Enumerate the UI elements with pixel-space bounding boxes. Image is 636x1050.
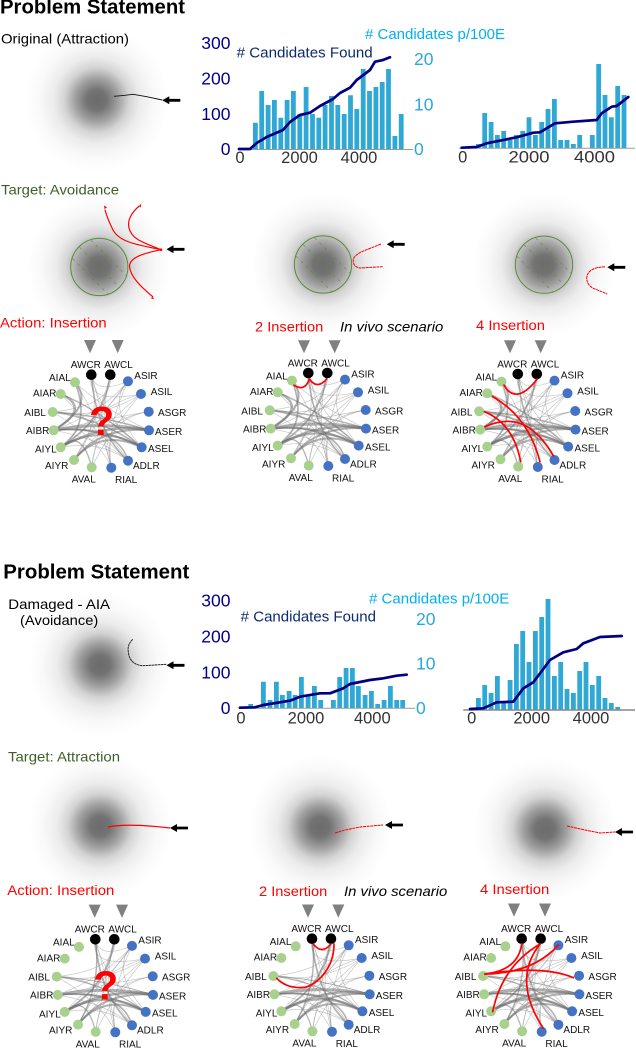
- neurons and names: AWCL: [531, 359, 560, 370]
- neurons and names: AIYR: [262, 459, 285, 470]
- neurons and names: AIAL: [479, 937, 502, 948]
- trajectory: 2 insertion: [353, 244, 383, 268]
- right axis labels: [414, 49, 434, 159]
- left axis labels: 100: [201, 662, 231, 682]
- arrow: 2 insertion stimulus: [385, 821, 403, 829]
- neurons and names: ASER: [155, 427, 182, 438]
- network: 2 insertion: [245, 904, 407, 1050]
- neurons and names: AIYL: [35, 445, 57, 456]
- left axis labels: 0: [221, 698, 231, 718]
- label: target avoidance: Target: Avoidance: [1, 181, 119, 197]
- neurons and names: AIYL: [256, 1009, 278, 1020]
- neurons and names: ASEL: [369, 1008, 395, 1019]
- label: in vivo scenario: In vivo scenario: [340, 319, 444, 335]
- neurons and names: AIAR: [463, 953, 487, 964]
- x axis labels: 2000: [288, 709, 324, 727]
- trajectory: attraction target: [108, 825, 170, 828]
- right axis labels: [416, 609, 436, 718]
- neurons and names: ASER: [585, 991, 613, 1002]
- neurons and names: AIYR: [45, 461, 68, 472]
- network: unknown insertion: [24, 340, 186, 486]
- x axis labels: 4000: [574, 148, 615, 166]
- right axis labels: 20: [416, 609, 436, 629]
- neurons and names: RIAL: [336, 1039, 358, 1050]
- neurons and names: AIBR: [247, 990, 270, 1001]
- neurons and names: ASGR: [158, 408, 186, 419]
- neurons and names: ASIL: [581, 951, 603, 962]
- right axis labels: 0: [416, 698, 426, 718]
- neurons and names: ASEL: [578, 1008, 604, 1019]
- neurons and names: AIBL: [28, 973, 50, 984]
- trajectory: 2 insertion: [335, 825, 383, 833]
- x axis labels: [236, 709, 391, 727]
- neurons and names: AWCL: [104, 360, 133, 371]
- left axis labels: 300: [201, 591, 231, 611]
- legend: candidates per 100E: # Candidates p/100E: [365, 27, 505, 43]
- x axis labels: 0: [236, 709, 246, 727]
- trajectories: three avoidance paths: [104, 204, 162, 299]
- arrow: 4 insertion stimulus: [607, 263, 625, 271]
- neurons and names: ADLR: [137, 1026, 164, 1037]
- neurons and names: AVAL: [498, 474, 523, 485]
- cumulative line: [462, 97, 628, 148]
- neurons and names: AIBL: [451, 407, 473, 418]
- x axis: [459, 147, 635, 149]
- neurons and names: RIAL: [332, 473, 355, 484]
- right axis labels: 10: [416, 653, 436, 673]
- neurons and names: AWCR: [75, 925, 105, 936]
- neurons and names: AWCR: [497, 359, 527, 370]
- gradient blob: damaged: [28, 593, 172, 737]
- bars: [476, 599, 620, 710]
- right axis labels: 0: [414, 139, 424, 159]
- neurons and names: AWCR: [291, 924, 322, 935]
- chart: candidates found, in vivo: [458, 64, 635, 166]
- panel: top experiment, attraction to avoidance: [0, 0, 635, 486]
- left axis labels: [201, 591, 231, 718]
- neurons and names: AWCL: [321, 358, 350, 369]
- x axis labels: 4000: [354, 709, 391, 727]
- neurons and names: ASIL: [155, 952, 177, 963]
- neurons and names: ASGR: [588, 972, 617, 983]
- cumulative line: [470, 636, 622, 709]
- neurons and names: AWCR: [71, 360, 101, 371]
- x axis labels: 4000: [573, 709, 609, 727]
- trajectory: original: [114, 94, 162, 100]
- neurons and names: AIAL: [270, 937, 292, 948]
- neurons and names: RIAL: [115, 475, 138, 486]
- neurons and names: [24, 360, 186, 486]
- neurons and names: ASIR: [138, 936, 162, 947]
- neurons and names: AIBL: [241, 406, 263, 417]
- neurons and names: ADLR: [133, 461, 160, 472]
- bars: [253, 69, 404, 150]
- sensory input markers: [89, 905, 128, 918]
- neurons and names: AIBR: [30, 991, 53, 1002]
- bars: [248, 668, 405, 708]
- arrow: original stimulus: [162, 96, 180, 104]
- synaptic edges: [479, 374, 576, 467]
- neurons and names: AWCL: [535, 924, 564, 935]
- neurons and names: AIYL: [462, 444, 484, 455]
- neurons and names: AWCR: [288, 358, 318, 369]
- neurons and names: AIBL: [24, 408, 46, 419]
- x axis labels: [467, 709, 609, 727]
- label: target attraction: Target: Attraction: [8, 748, 120, 764]
- left axis labels: 200: [201, 627, 231, 647]
- neurons and names: AVAL: [502, 1039, 527, 1050]
- gradient blob: attraction target: [28, 754, 172, 898]
- inserted connections: [294, 379, 327, 388]
- chart: candidates found, in vivo damaged: [463, 599, 635, 727]
- x axis labels: 2000: [513, 709, 550, 727]
- x axis: [240, 707, 415, 709]
- x axis labels: 2000: [508, 148, 550, 166]
- neurons and names: AIAR: [37, 953, 60, 964]
- neurons and names: [451, 359, 613, 485]
- neurons and names: [245, 924, 407, 1050]
- neurons and names: ASGR: [584, 407, 613, 418]
- neurons and names: ASIR: [561, 370, 584, 381]
- label: in vivo scenario: In vivo scenario: [344, 883, 448, 899]
- neurons and names: ASIR: [351, 369, 375, 380]
- left axis labels: 300: [201, 33, 231, 53]
- x axis labels: 2000: [281, 149, 318, 167]
- gradient blob: 4 insertion result: [473, 757, 617, 901]
- neurons and names: ASIL: [577, 386, 599, 397]
- neurons and names: ASEL: [148, 444, 174, 455]
- label: original attraction: Original (Attraction): [1, 30, 129, 46]
- synaptic edges: [270, 373, 366, 466]
- network: unknown insertion: [28, 905, 190, 1050]
- title: Problem Statement: [3, 561, 190, 583]
- neurons and names: [241, 358, 403, 484]
- label: damaged AIA avoidance: (Avoidance): [20, 612, 98, 628]
- synaptic edges: [483, 939, 579, 1032]
- neurons and names: ASER: [372, 425, 399, 436]
- x axis labels: [458, 148, 615, 166]
- neurons and names: AIAL: [476, 372, 498, 383]
- bars: [476, 64, 626, 148]
- inserted connections: [277, 944, 334, 988]
- neurons and names: ASEL: [574, 443, 601, 454]
- neurons and names: RIAL: [545, 1039, 568, 1050]
- arrow: target stimulus: [166, 245, 184, 253]
- x axis labels: [235, 149, 377, 167]
- neurons and names: AIYR: [475, 1025, 499, 1036]
- panel: bottom experiment, avoidance to attraction: [3, 561, 635, 1050]
- network: 4 insertion: [451, 340, 613, 485]
- neurons and names: ASIR: [565, 935, 588, 946]
- sensory input markers: [298, 340, 341, 353]
- neurons and names: ADLR: [563, 1025, 590, 1036]
- gradient blob: original: [25, 28, 169, 172]
- neurons and names: AIAR: [33, 389, 56, 400]
- right axis labels: 10: [414, 95, 434, 115]
- x axis labels: 0: [467, 709, 476, 727]
- legend: candidates found: # Candidates Found: [241, 610, 376, 626]
- network: 4 insertion: [455, 904, 617, 1050]
- network: 2 insertion: [241, 340, 403, 484]
- neurons and names: ASEL: [152, 1009, 178, 1020]
- neurons and names: ASIR: [355, 935, 378, 946]
- neurons and names: ASGR: [375, 406, 403, 417]
- neurons and names: AIBR: [243, 424, 266, 435]
- x axis: [240, 148, 413, 150]
- neurons and names: RIAL: [542, 474, 564, 485]
- neurons and names: ASER: [159, 992, 186, 1003]
- neurons and names: ASER: [376, 991, 403, 1002]
- neurons and names: AIAR: [250, 387, 273, 398]
- gradient blob with target zone: 2 insertion result: [251, 192, 395, 336]
- neurons and names: AIYR: [472, 460, 495, 471]
- question mark: ?: [89, 398, 114, 444]
- neurons and names: ASIL: [371, 951, 394, 962]
- neurons and names: AIAL: [49, 373, 71, 384]
- cumulative line: [239, 57, 390, 149]
- neurons and names: ADLR: [354, 1025, 380, 1036]
- arrow: 2 insertion stimulus: [387, 240, 405, 248]
- neurons and names: AVAL: [292, 1039, 317, 1050]
- label: 2 insertion: 2 Insertion: [259, 883, 327, 899]
- label: damaged AIA avoidance: Damaged - AIA: [8, 596, 111, 612]
- neurons and names: AVAL: [76, 1039, 100, 1050]
- sensory input markers: [504, 340, 547, 353]
- neurons and names: AIBR: [26, 426, 49, 437]
- neurons and names: ASER: [582, 426, 609, 437]
- right axis labels: 20: [414, 49, 434, 69]
- neurons and names: AIBL: [455, 972, 477, 983]
- label: 4 insertion: 4 Insertion: [480, 881, 549, 897]
- left axis labels: [201, 33, 231, 159]
- inserted connections: [484, 379, 553, 462]
- label: 2 insertion: 2 Insertion: [255, 319, 323, 335]
- neurons and names: ASIL: [151, 387, 173, 398]
- gradient blob with target zone: avoidance target: [27, 195, 171, 339]
- neurons and names: ASIL: [368, 385, 390, 396]
- trajectory: damaged: [128, 639, 167, 666]
- label: action insertion: Action: Insertion: [7, 882, 114, 898]
- sensory input markers: [302, 904, 344, 918]
- sensory input markers: [84, 340, 124, 353]
- label: action insertion: Action: Insertion: [0, 314, 107, 330]
- neurons and names: AIAL: [266, 371, 288, 382]
- neurons and names: AIAL: [53, 938, 75, 949]
- neurons and names: AIYL: [465, 1009, 488, 1020]
- question mark: ?: [93, 963, 118, 1009]
- neurons and names: AIYL: [39, 1009, 61, 1020]
- neurons and names: AWCL: [108, 925, 137, 936]
- inserted connections: [485, 944, 573, 1028]
- arrow: damaged stimulus: [166, 661, 184, 669]
- arrow: target stimulus: [170, 824, 188, 832]
- neurons and names: AIBR: [452, 425, 476, 436]
- neurons and names: AIYR: [49, 1026, 72, 1037]
- label: damaged AIA avoidance: [8, 596, 111, 628]
- x axis labels: 0: [235, 149, 245, 167]
- x axis: [463, 709, 635, 711]
- cumulative line: [240, 675, 407, 708]
- neurons and names: AWCL: [325, 924, 354, 935]
- trajectory: 4 insertion: [587, 267, 607, 294]
- gradient blob with target zone: 4 insertion result: [472, 193, 616, 337]
- gradient blob: 2 insertion result: [248, 755, 392, 899]
- neurons and names: [455, 924, 617, 1050]
- neurons and names: AIBL: [245, 972, 267, 983]
- neurons and names: [28, 925, 190, 1050]
- neurons and names: AWCR: [501, 924, 531, 935]
- left axis labels: 0: [221, 139, 231, 159]
- neurons and names: AIYL: [252, 443, 274, 454]
- arrow: 4 insertion stimulus: [615, 828, 633, 836]
- trajectory: 4 insertion: [567, 826, 615, 833]
- label: 4 insertion: 4 Insertion: [476, 317, 545, 333]
- chart: candidates found, original: [201, 27, 505, 167]
- sensory input markers: [508, 904, 551, 917]
- synaptic edges: [53, 375, 149, 468]
- legend: candidates found: # Candidates Found: [237, 46, 373, 62]
- x axis labels: 0: [458, 148, 467, 166]
- neurons and names: AIAR: [254, 953, 277, 964]
- synaptic edges: [273, 939, 370, 1032]
- neurons and names: AIYR: [266, 1025, 289, 1036]
- neurons and names: AVAL: [72, 475, 96, 486]
- neurons and names: ADLR: [560, 460, 586, 471]
- neurons and names: ADLR: [350, 459, 377, 470]
- neurons and names: ASIR: [134, 371, 158, 382]
- neurons and names: ASGR: [162, 973, 190, 984]
- neurons and names: AVAL: [289, 473, 313, 484]
- left axis labels: 100: [201, 104, 231, 124]
- neurons and names: ASEL: [365, 442, 391, 453]
- chart: candidates found, damaged: [201, 591, 510, 727]
- legend: candidates per 100E: # Candidates p/100E: [369, 591, 510, 607]
- x axis labels: 4000: [341, 149, 377, 167]
- neurons and names: ASGR: [379, 972, 407, 983]
- neurons and names: AIBR: [456, 990, 480, 1001]
- neurons and names: AIAR: [460, 388, 483, 399]
- left axis labels: 200: [201, 68, 231, 88]
- synaptic edges: [57, 939, 153, 1032]
